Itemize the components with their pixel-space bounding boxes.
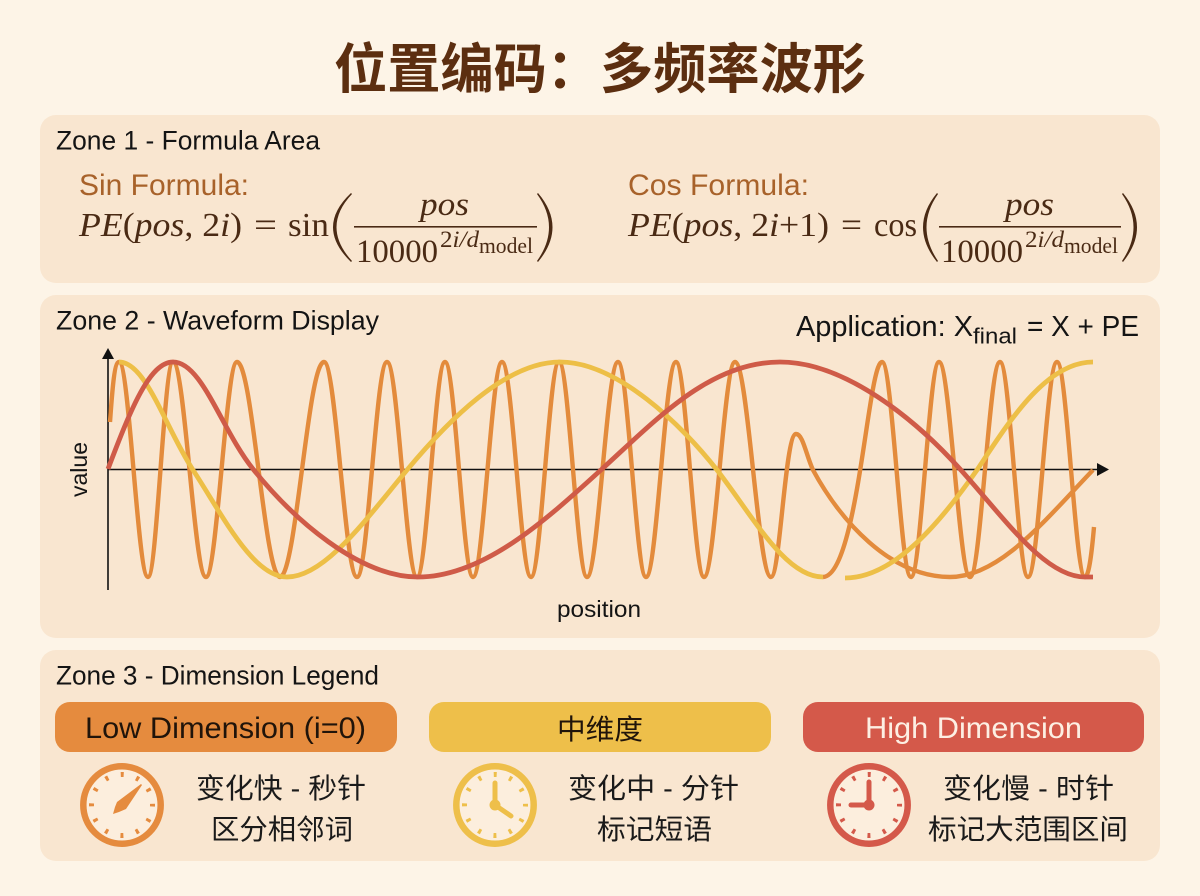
fraction bar — [939, 226, 1121, 228]
pill: high dimension: High Dimension — [865, 712, 1082, 745]
waveform: high dimension (red) — [108, 362, 1093, 577]
cos function name: cos — [874, 207, 917, 244]
text: low dimension description: 变化快 - 秒针 — [196, 773, 366, 804]
legend item: low dimension — [55, 702, 397, 845]
sin formula — [78, 169, 553, 270]
icon: clock, minute hand — [456, 766, 534, 844]
x axis label: position — [557, 596, 641, 622]
equals sign: = — [841, 207, 862, 244]
heading: Zone 3: Zone 3 - Dimension Legend — [56, 660, 379, 690]
sin formula left side: PE(pos, 2i) — [78, 207, 242, 244]
left parenthesis — [333, 193, 352, 262]
fraction bar — [354, 226, 537, 228]
chart axes — [102, 348, 1109, 590]
application formula — [796, 311, 1139, 348]
heading: Zone 1: Zone 1 - Formula Area — [56, 126, 320, 156]
heading: Zone 2: Zone 2 - Waveform Display — [56, 306, 380, 336]
title: 位置编码：多频率波形 — [334, 40, 866, 100]
exponent: 2i/d — [440, 227, 480, 252]
pill: low dimension — [55, 702, 397, 752]
subscript model: model — [1064, 233, 1118, 258]
exponent: 2i/d — [1025, 227, 1065, 252]
cos formula — [627, 169, 1137, 270]
equals sign: = — [254, 207, 277, 244]
application formula: final — [973, 324, 1017, 348]
cos formula label: Cos Formula: — [628, 169, 809, 202]
text: medium dimension description: 标记短语 — [597, 814, 712, 845]
text: high dimension description — [928, 773, 1128, 845]
icon: clock, hour hand — [830, 766, 908, 844]
text: low dimension description — [196, 773, 366, 845]
numerator: pos — [1003, 187, 1054, 223]
right parenthesis — [1122, 193, 1137, 262]
right parenthesis — [537, 193, 552, 262]
subscript model: model — [479, 233, 533, 258]
left parenthesis — [923, 193, 938, 262]
application formula: Application: X — [796, 311, 973, 343]
text: high dimension description: 变化慢 - 时针 — [943, 773, 1114, 804]
text: high dimension description: 标记大范围区间 — [928, 814, 1128, 845]
panel: Zone 2 waveform display — [40, 295, 1160, 638]
denominator base: 10000 — [356, 234, 438, 270]
pill: medium dimension — [429, 702, 771, 752]
application formula: = X + PE — [1027, 311, 1139, 343]
text: medium dimension description: 变化中 - 分针 — [568, 773, 739, 804]
numerator: pos — [418, 187, 469, 223]
sin function name: sin — [288, 207, 329, 244]
text: low dimension description: 区分相邻词 — [211, 814, 353, 845]
text: medium dimension description — [568, 773, 739, 845]
pill: high dimension — [803, 702, 1144, 752]
cos formula left side: PE(pos, 2i+1) — [627, 207, 829, 244]
y axis label: value — [66, 442, 92, 497]
denominator base: 10000 — [941, 234, 1023, 270]
sin formula label: Sin Formula: — [79, 169, 249, 202]
icon: gauge clock, second hand — [83, 766, 161, 844]
waveform: medium dimension (yellow) — [119, 362, 1093, 578]
pill: medium dimension: 中维度 — [557, 714, 643, 745]
legend item: high dimension — [803, 702, 1144, 845]
panel: Zone 1 formula area — [40, 115, 1160, 283]
legend item: medium dimension — [429, 702, 771, 845]
panel: Zone 3 dimension legend — [40, 650, 1160, 861]
pill: low dimension: Low Dimension (i=0) — [85, 712, 366, 745]
waveform: low dimension (orange) — [110, 362, 1094, 577]
